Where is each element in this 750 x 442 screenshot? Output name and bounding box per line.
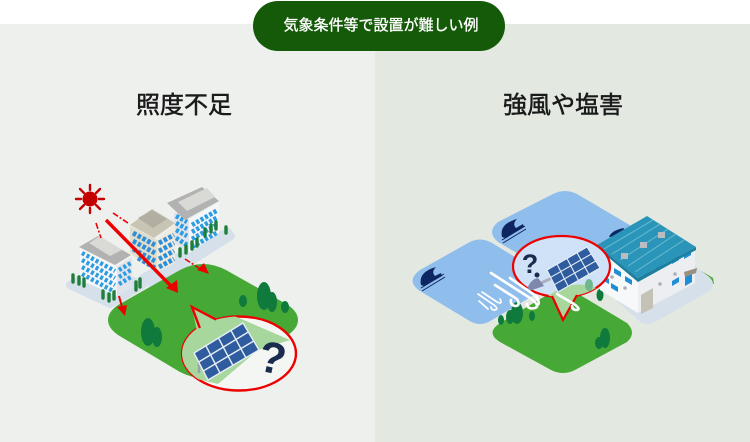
wind gusts xyxy=(478,273,578,310)
green field xyxy=(492,289,632,373)
field trees xyxy=(498,289,610,349)
small trees xyxy=(73,222,226,301)
illustration: low light scene xyxy=(70,185,298,390)
panel: low light background xyxy=(0,24,375,442)
wave icons xyxy=(421,219,624,291)
building: left office xyxy=(79,236,132,296)
panel: strong wind and salt damage background xyxy=(375,24,750,442)
ground pads xyxy=(70,232,231,304)
sea tile: upper xyxy=(492,191,645,284)
callout bubble with tilted solar panel xyxy=(513,236,610,320)
callout bubble with solar panel xyxy=(180,307,296,390)
green field xyxy=(108,264,298,378)
question mark: ? xyxy=(254,332,291,385)
red arrows: blocked sunlight xyxy=(96,213,209,316)
illustration layer xyxy=(66,184,714,392)
factory xyxy=(597,216,697,314)
heading: low light: 照度不足 xyxy=(136,92,232,119)
field trees xyxy=(141,282,289,347)
illustration: strong wind and salt damage scene xyxy=(412,191,714,373)
question mark: ? xyxy=(522,249,538,279)
heading pill xyxy=(253,1,505,51)
factory ground pad xyxy=(695,267,714,284)
sun xyxy=(76,185,104,213)
building: right office xyxy=(167,187,219,253)
heading pill: 気象条件等で設置が難しい例 xyxy=(283,17,478,34)
building: centre beige office xyxy=(130,209,175,272)
sea tile: lower xyxy=(412,240,556,324)
heading: strong wind and salt damage: 強風や塩害 xyxy=(503,92,623,119)
